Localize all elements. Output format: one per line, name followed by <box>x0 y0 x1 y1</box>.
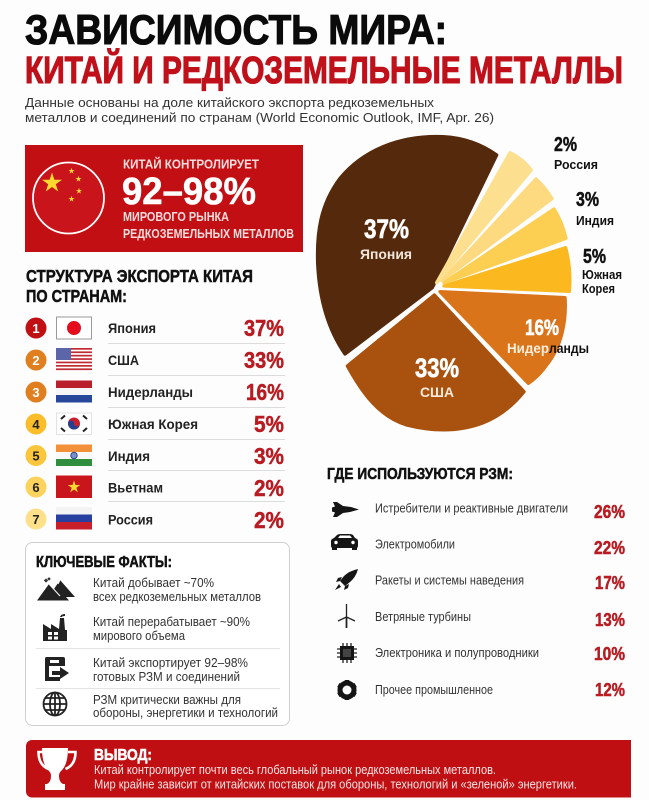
row: fighter jets <box>332 502 625 522</box>
row: South Korea <box>26 411 284 437</box>
row: other industry: Прочее промышленное <box>375 683 493 697</box>
subtitle: металлов и соединений по странам (World Economic Outlook, IMF, Apr. 26) <box>25 111 494 125</box>
icon: factory <box>43 614 67 641</box>
row: India: 3% <box>254 443 284 469</box>
pie label: Russia: Россия <box>554 157 598 172</box>
row: fighter jets: 26% <box>594 502 625 522</box>
panel: key facts <box>26 542 290 726</box>
pie label: India: 3% <box>576 189 599 211</box>
row: Vietnam: Вьетнам <box>108 480 163 496</box>
row: rockets: Ракеты и системы наведения <box>375 574 524 588</box>
row: Netherlands <box>26 379 284 405</box>
pie label: South Korea: Южная <box>582 268 622 282</box>
slice: Japan <box>318 137 497 354</box>
pie label: South Korea: Корея <box>582 282 615 296</box>
row: Netherlands: 16% <box>246 379 284 405</box>
row: electric cars: Электромобили <box>375 538 455 552</box>
row: electric cars <box>331 534 625 558</box>
row: Vietnam: 6 <box>32 480 40 495</box>
slice: India <box>444 209 566 283</box>
panel: conclusion: ВЫВОД: <box>94 747 152 764</box>
fact: mining: всех редкоземельных металлов <box>93 590 261 604</box>
icon: mountains <box>37 577 75 600</box>
icon: China flag <box>33 162 104 234</box>
title <box>25 6 623 92</box>
heading: export structure <box>26 266 253 306</box>
icon: trophy <box>38 748 76 790</box>
pie label: South Korea: 5% <box>583 246 606 268</box>
pie label: USA: 33% <box>415 353 459 383</box>
panel: China controls <box>25 145 303 252</box>
fact: export: Китай экспортирует 92–98% <box>93 656 248 670</box>
row: India: 5 <box>32 448 40 464</box>
row: Netherlands: 3 <box>32 385 40 400</box>
fact: importance <box>93 693 278 720</box>
pie label: USA <box>415 353 459 400</box>
fact: importance: обороны, энергетики и технологий <box>93 706 278 720</box>
row: Russia: 2% <box>254 507 284 533</box>
fact: processing: Китай перерабатывает ~90% <box>93 615 250 629</box>
row: USA <box>26 347 284 373</box>
slice: USA <box>347 295 524 430</box>
row: USA: 33% <box>244 347 284 373</box>
row: electronics: 10% <box>594 644 625 664</box>
row: electronics: Электроника и полупроводники <box>375 646 539 660</box>
slice: South Korea <box>444 248 570 291</box>
row: Japan: 1 <box>32 321 40 336</box>
icon: globe <box>44 692 66 716</box>
pie label: Netherlands: Нидер <box>507 340 549 356</box>
row: electronics <box>337 643 625 664</box>
country ranking list <box>26 315 285 533</box>
row: Vietnam: 2% <box>254 475 284 501</box>
row: electric cars: 22% <box>594 538 625 558</box>
pie label: USA: США <box>420 384 454 400</box>
panel: China controls: МИРОВОГО РЫНКА <box>123 210 229 224</box>
uses list <box>331 502 625 700</box>
row: South Korea: 5% <box>254 411 284 437</box>
pie label: Russia <box>554 134 598 172</box>
row: wind turbines: Ветряные турбины <box>375 610 471 624</box>
row: Japan: Япония <box>108 321 156 336</box>
fact: mining <box>93 576 261 604</box>
icon: export box <box>45 657 69 681</box>
pie label: South Korea <box>582 246 622 296</box>
pie label: Russia: 2% <box>554 134 577 156</box>
row: rockets <box>335 569 625 593</box>
row: USA: США <box>108 353 139 368</box>
fact: export <box>93 656 248 684</box>
pie label: Netherlands <box>507 315 589 356</box>
fact: importance: РЗМ критически важны для <box>93 693 241 707</box>
panel: China controls: РЕДКОЗЕМЕЛЬНЫХ МЕТАЛЛОВ <box>123 227 294 241</box>
pie label: Japan: 37% <box>364 214 409 244</box>
pie label: Japan <box>360 214 412 262</box>
row: India: Индия <box>108 449 150 464</box>
row: wind turbines <box>338 604 625 630</box>
pie label: India <box>576 189 614 228</box>
panel: China controls: КИТАЙ КОНТРОЛИРУЕТ <box>123 156 259 172</box>
title: ЗАВИСИМОСТЬ МИРА: <box>25 6 447 53</box>
row: rockets: 17% <box>595 573 625 593</box>
row: Vietnam <box>26 475 284 501</box>
heading: uses: ГДЕ ИСПОЛЬЗУЮТСЯ РЗМ: <box>327 466 513 483</box>
slice: Russia <box>437 153 531 283</box>
panel: conclusion: Мир крайне зависит от китайских поставок для обороны, технологий и «зеленой» энергетики. <box>94 778 577 792</box>
pie label: India: Индия <box>576 213 614 228</box>
heading: export structure: СТРУКТУРА ЭКСПОРТА КИТАЯ <box>26 266 253 286</box>
heading: key facts: КЛЮЧЕВЫЕ ФАКТЫ: <box>36 554 172 571</box>
panel: China controls: 92–98% <box>122 171 256 213</box>
row: fighter jets: Истребители и реактивные двигатели <box>375 502 568 516</box>
fact: mining: Китай добывает ~70% <box>93 576 214 590</box>
row: other industry: 12% <box>595 680 625 700</box>
row: India <box>26 443 284 469</box>
row: Russia: 7 <box>32 512 40 527</box>
fact: processing: мирового объема <box>93 629 185 643</box>
row: Russia: Россия <box>108 512 153 528</box>
row: Russia <box>26 507 284 533</box>
row: South Korea: Южная Корея <box>108 417 198 432</box>
pie label: Netherlands: 16% <box>525 315 559 340</box>
row: wind turbines: 13% <box>595 610 625 630</box>
slice: Netherlands <box>440 292 565 383</box>
heading: export structure: ПО СТРАНАМ: <box>26 286 127 306</box>
fact: export: готовых РЗМ и соединений <box>93 670 240 684</box>
row: Netherlands: Нидерланды <box>108 385 193 400</box>
subtitle <box>25 96 494 125</box>
pie chart <box>318 134 622 430</box>
panel: conclusion <box>26 740 631 798</box>
panel: conclusion: Китай контролирует почти весь глобальный рынок редкоземельных металлов. <box>94 763 496 777</box>
slice: third light <box>442 179 552 281</box>
pie label: Japan: Япония <box>360 246 412 262</box>
row: Japan: 37% <box>244 315 284 341</box>
row: Japan <box>26 315 284 341</box>
pie label: Netherlands: ланды <box>549 340 589 356</box>
subtitle: Данные основаны на доле китайского экспорта редкоземельных <box>25 96 435 110</box>
row: other industry <box>338 680 625 700</box>
row: USA: 2 <box>32 353 40 368</box>
row: South Korea: 4 <box>32 417 40 432</box>
fact: processing <box>93 615 250 643</box>
